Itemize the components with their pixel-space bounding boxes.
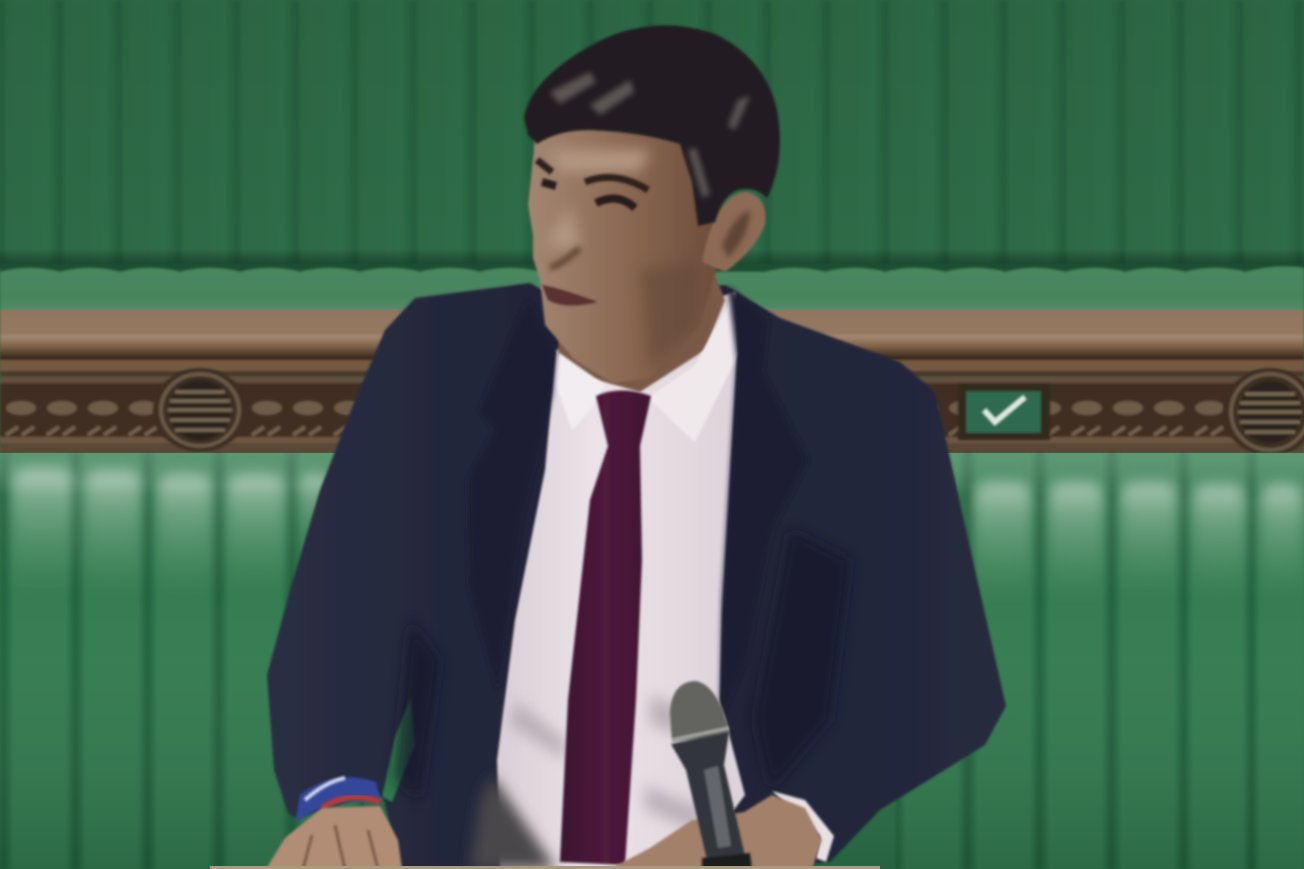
mouth (542, 285, 598, 306)
panel: upper bench cushion roll (0, 264, 1304, 312)
left hand (266, 806, 402, 869)
brows and eyes (537, 160, 648, 190)
panel: carved wood frieze (0, 377, 1304, 455)
ear (702, 192, 765, 272)
neck (558, 250, 725, 392)
figure: speaker (266, 25, 1006, 869)
icon: left speaker grille (153, 368, 247, 452)
right hand (610, 795, 822, 869)
nose shadow (550, 248, 580, 268)
shirt fold shading (510, 695, 718, 830)
left lapel (468, 300, 556, 690)
forehead and nose highlight (545, 150, 650, 250)
right lapel (720, 286, 808, 720)
left wristbands (296, 777, 381, 822)
icon: right speaker grille (1223, 368, 1304, 456)
tie (560, 390, 651, 865)
hair highlights (550, 72, 750, 197)
suit jacket (267, 283, 1006, 869)
lectern edge (210, 866, 880, 869)
face (528, 100, 725, 383)
shirt front (497, 292, 745, 869)
panel: green leather seat backs (0, 453, 1304, 869)
green gap between arm and torso (382, 697, 415, 802)
panel: wooden rail (0, 310, 1304, 377)
jacket shadow patches (395, 530, 850, 800)
right shirt cuff (772, 791, 834, 862)
microphone (670, 681, 752, 869)
shirt lower shadow (470, 775, 556, 869)
cheek shadow (640, 260, 700, 370)
panel: green pleated back wall (0, 0, 1304, 268)
icon: green check sign (958, 384, 1050, 440)
hair (524, 25, 780, 226)
shirt collars (556, 352, 605, 430)
